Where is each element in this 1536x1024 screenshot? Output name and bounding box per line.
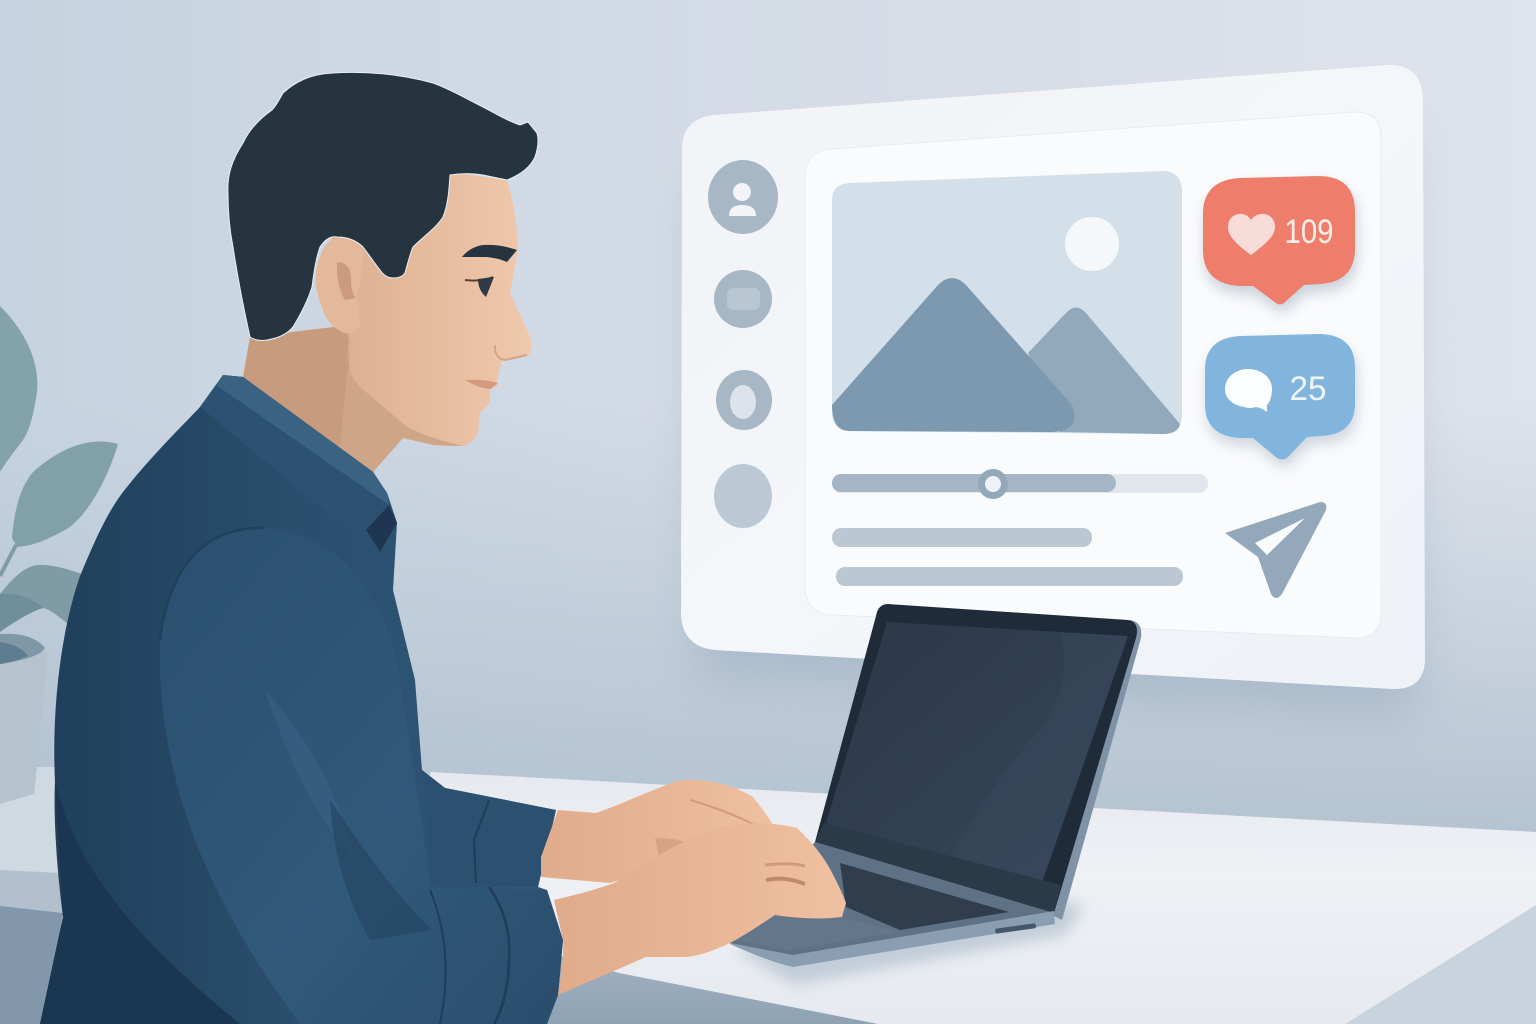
nose underside — [495, 345, 527, 360]
neck — [235, 325, 403, 500]
near hand — [554, 823, 846, 995]
laptop lid — [815, 604, 1137, 913]
ear — [316, 238, 363, 334]
slider — [832, 469, 1208, 499]
near sleeve — [160, 528, 563, 1024]
icon: heart — [1228, 214, 1275, 255]
icon: speech bubble — [1225, 369, 1272, 412]
eye — [465, 277, 494, 297]
potted plant — [0, 306, 118, 804]
sidebar avatar icon — [708, 160, 778, 234]
text line placeholders — [832, 528, 1183, 586]
comments notification badge — [1205, 334, 1357, 468]
sidebar drop icon — [716, 370, 772, 430]
outer panel — [681, 65, 1425, 689]
icon: send paper plane — [1225, 502, 1326, 598]
sleeve shading — [40, 782, 240, 1024]
man — [40, 72, 846, 1024]
panel shadow — [696, 136, 1416, 716]
image placeholder — [832, 171, 1182, 434]
sidebar blank button — [714, 464, 772, 528]
laptop screen — [826, 622, 1128, 885]
jaw shadow — [340, 337, 463, 472]
laptop lid edge — [1050, 620, 1141, 920]
sidebar video icon — [714, 270, 772, 328]
inner card — [805, 112, 1381, 638]
laptop base — [730, 842, 1054, 958]
likes notification badge: 109 — [1284, 213, 1334, 251]
face and head — [330, 172, 532, 446]
plant pot — [0, 645, 48, 804]
laptop — [730, 604, 1141, 985]
laptop shadow — [735, 900, 1085, 985]
desk — [0, 767, 1536, 1024]
trackpad — [735, 915, 900, 950]
far hand — [541, 780, 773, 883]
likes notification badge — [1203, 176, 1357, 312]
floating social media interface — [681, 65, 1425, 716]
mouth — [465, 380, 498, 389]
keyboard — [840, 863, 1009, 930]
eyebrow — [462, 245, 517, 262]
shirt torso — [40, 375, 563, 1024]
laptop chin — [815, 823, 1061, 913]
far sleeve — [422, 770, 556, 887]
hair — [228, 72, 538, 341]
comments notification badge: 25 — [1290, 370, 1326, 408]
port — [995, 923, 1036, 934]
collar — [200, 375, 397, 552]
